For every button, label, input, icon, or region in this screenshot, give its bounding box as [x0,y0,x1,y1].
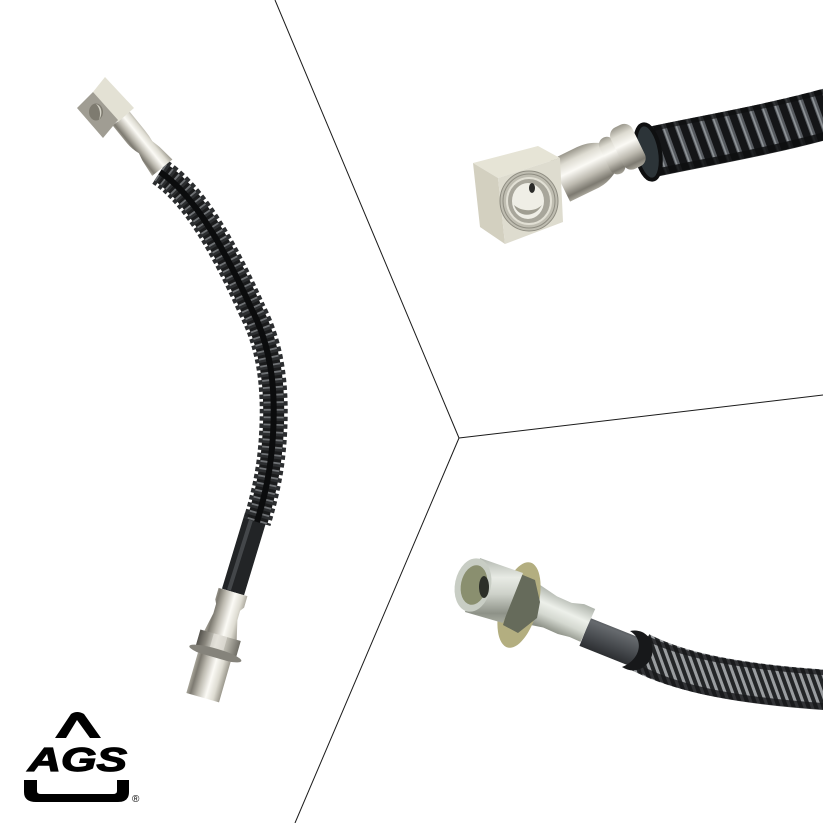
logo bottom bracket [24,780,129,802]
full brake hose at left [77,77,274,705]
close-up: square fitting at top right [473,87,823,244]
upper square fitting [77,77,172,176]
AGS logo [24,712,140,805]
logo top chevron [55,712,101,738]
smooth hose section [233,516,256,592]
corrugated sleeve [160,172,274,522]
square block [473,146,563,244]
divider lines [275,0,823,823]
smooth hose section [585,632,650,658]
logo wordmark: AGS [27,741,127,778]
washer [489,558,549,652]
registered mark: ® [132,794,140,805]
close-up: threaded fitting at bottom right [450,555,823,707]
corrugated sleeve [646,87,823,175]
corrugated sleeve [640,635,823,707]
hex nut [503,573,540,633]
threaded cylinder [450,555,523,623]
sleeve opening [622,631,653,670]
crimped collar [521,584,595,648]
sleeve opening [631,122,665,182]
lower fitting [177,585,259,705]
crimped stem [549,121,649,202]
